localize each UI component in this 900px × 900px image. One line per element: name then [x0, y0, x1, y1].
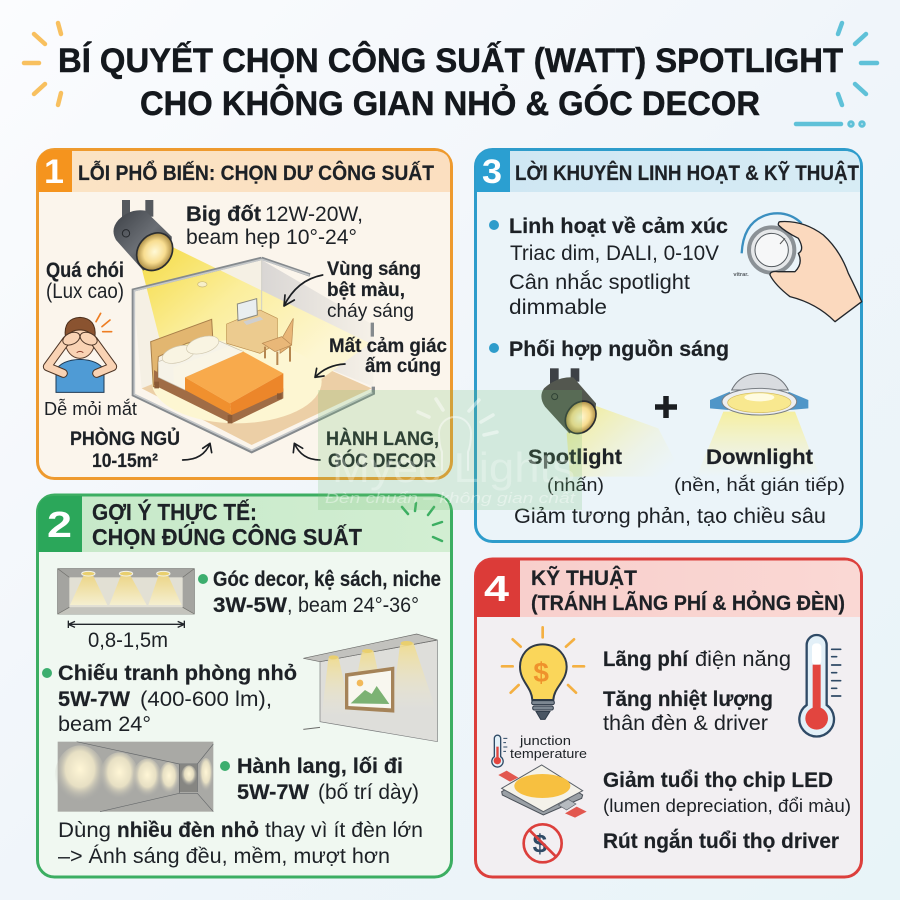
icon: no dollar: $	[533, 829, 548, 859]
text: conclusion: thay vì ít đèn lớn	[265, 819, 423, 842]
text: conclusion: nhiều đèn nhỏ	[117, 819, 259, 842]
title: CHO KHÔNG GIAN NHỎ & GÓC DECOR	[140, 84, 760, 123]
panel 2: practical suggestions	[38, 495, 452, 877]
icon: hand turning dimmer	[733, 213, 862, 322]
text: corridor	[220, 755, 419, 804]
icon: dollar bulb	[502, 627, 584, 719]
label: junction temperature: junction	[519, 734, 571, 748]
label: downlight	[674, 446, 845, 495]
panel 2 header	[38, 496, 450, 552]
panel 4 header: (TRÁNH LÃNG PHÍ & HỎNG ĐÈN)	[531, 591, 845, 615]
text: reduces contrast: Giảm tương phản, tạo chiều sâu	[514, 505, 826, 528]
panel 2 header: 2	[47, 504, 72, 545]
text: conclusion: Dùng	[58, 819, 111, 842]
text: eye strain: Dễ mỏi mắt	[44, 398, 137, 419]
text: more heat	[603, 688, 773, 735]
panel 4: technical	[476, 559, 862, 877]
text: picture lighting	[42, 662, 297, 736]
text: more heat: Tăng nhiệt lượng	[603, 688, 773, 711]
text: too glaring	[46, 259, 124, 303]
text: too glaring: Quá chói	[46, 259, 124, 282]
icon: LED chip	[498, 765, 587, 818]
panel 1 header	[38, 150, 450, 192]
text: big wattage: Big đốt	[186, 203, 261, 226]
text: picture lighting: beam 24°	[58, 713, 151, 736]
watermark: Myec Lights	[332, 444, 575, 491]
text: burned out area: bệt màu,	[327, 280, 405, 301]
icon: downlight	[697, 373, 820, 477]
icon: spotlight	[541, 368, 683, 477]
dimension: shelf width	[68, 621, 184, 652]
text: bedroom size: 10-15m²	[92, 451, 158, 472]
text: emotional flexibility: Cân nhắc spotlight	[509, 271, 690, 294]
panel 1: common mistake	[38, 150, 452, 478]
icon: thermometer	[799, 635, 841, 736]
text: emotional flexibility: Triac dim, DALI, 0-10V	[510, 242, 719, 265]
text: burned out area: cháy sáng	[327, 301, 414, 322]
illustration: bedroom	[113, 200, 373, 460]
illustration: corridor	[55, 742, 213, 812]
text: bedroom size: PHÒNG NGỦ	[70, 428, 180, 450]
icon: hand turning dimmer: vitrar.	[733, 272, 749, 278]
text: wasted electricity	[603, 648, 791, 671]
spotlight	[122, 200, 130, 233]
text: decor corner: Góc decor, kệ sách, niche	[213, 568, 441, 591]
label: downlight: Downlight	[706, 446, 813, 469]
text: LED chip lifetime: Giảm tuổi thọ chip LED	[603, 769, 833, 792]
text: corridor: 5W-7W	[237, 781, 309, 804]
label: spotlight: (nhấn)	[547, 475, 604, 495]
watermark	[318, 390, 582, 510]
text: bedroom size	[70, 428, 180, 472]
dimension: shelf width: 0,8-1,5m	[88, 629, 168, 652]
panel 4 header	[476, 560, 860, 617]
label: spotlight	[528, 446, 622, 495]
text: conclusion: –> Ánh sáng đều, mềm, mượt hơn	[58, 845, 390, 868]
label: junction temperature: temperature	[510, 747, 587, 761]
text: conclusion	[58, 819, 423, 868]
text: emotional flexibility	[489, 215, 728, 319]
text: picture lighting: Chiếu tranh phòng nhỏ	[58, 662, 297, 685]
text: wasted electricity: Lãng phí	[603, 648, 689, 671]
text: burned out area: Vùng sáng	[327, 259, 421, 280]
text: corridor: (bố trí dày)	[318, 781, 419, 804]
panel 1 header: LỖI PHỔ BIẾN: CHỌN DƯ CÔNG SUẤT	[78, 161, 434, 185]
text: big wattage	[186, 203, 363, 249]
text: too glaring: (Lux cao)	[46, 280, 124, 303]
icon: plus	[655, 396, 677, 418]
label: downlight: (nền, hắt gián tiếp)	[674, 474, 845, 495]
text: wasted electricity: điện năng	[695, 648, 791, 671]
icon: no dollar	[524, 824, 562, 862]
panel 2 header: CHỌN ĐÚNG CÔNG SUẤT	[92, 523, 362, 550]
icon: blue sparkle rays	[796, 23, 877, 126]
text: loss of cosiness	[329, 336, 447, 377]
text: LED chip lifetime: (lumen depreciation, đổi màu)	[603, 796, 851, 816]
panel 3 header	[476, 150, 860, 192]
panel 2 header: GỢI Ý THỰC TẾ:	[92, 498, 257, 525]
illustration: picture wall	[303, 634, 437, 742]
panel 3: flexible advice	[476, 150, 862, 542]
desk	[227, 310, 277, 353]
bed	[151, 319, 213, 387]
label: spotlight: Spotlight	[528, 446, 622, 469]
text: decor corner: , beam 24°-36°	[287, 594, 419, 617]
label: junction temperature	[510, 734, 587, 761]
panel 1 header: 1	[44, 153, 64, 191]
title	[58, 41, 843, 123]
panel 3 header: 3	[482, 153, 502, 191]
illustration: person covering eyes	[47, 313, 113, 392]
text: big wattage: beam hẹp 10°-24°	[186, 226, 357, 249]
text: picture lighting: 5W-7W	[58, 688, 130, 711]
text: picture lighting: (400-600 lm),	[140, 688, 272, 711]
text: decor corner: 3W-5W	[213, 594, 287, 617]
text: loss of cosiness: Mất cảm giác	[329, 336, 447, 357]
text: decor corner	[198, 568, 441, 617]
text: driver lifetime: Rút ngắn tuổi thọ driver	[603, 829, 839, 853]
text: corridor and decor corner	[326, 428, 439, 472]
text: emotional flexibility: Linh hoạt về cảm xúc	[509, 215, 728, 238]
panel 3 header: LỜI KHUYÊN LINH HOẠT & KỸ THUẬT	[515, 161, 859, 185]
text: LED chip lifetime	[603, 769, 851, 816]
panel 4 header: 4	[484, 568, 509, 609]
icon: dollar bulb: $	[533, 657, 549, 688]
text: combine light sources: Phối hợp nguồn sáng	[509, 338, 729, 361]
title: BÍ QUYẾT CHỌN CÔNG SUẤT (WATT) SPOTLIGHT	[58, 41, 843, 80]
arrows	[183, 275, 345, 460]
text: corridor and decor corner: GÓC DECOR	[328, 450, 436, 472]
text: more heat: thân đèn & driver	[603, 712, 768, 735]
icon: orange sparkle rays	[24, 23, 61, 105]
text: corridor: Hành lang, lối đi	[237, 755, 403, 778]
icon: small thermometer	[492, 735, 507, 767]
illustration: niche with three lights	[58, 569, 194, 614]
text: corridor and decor corner: HÀNH LANG,	[326, 428, 439, 450]
text: loss of cosiness: ấm cúng	[365, 356, 441, 377]
watermark: Đèn chuẩn – không gian chất	[325, 490, 576, 507]
light beam	[142, 247, 370, 417]
text: burned out area	[327, 259, 421, 322]
text: emotional flexibility: dimmable	[509, 296, 607, 319]
text: big wattage: 12W-20W,	[265, 203, 363, 226]
panel 4 header: KỸ THUẬT	[531, 566, 637, 590]
